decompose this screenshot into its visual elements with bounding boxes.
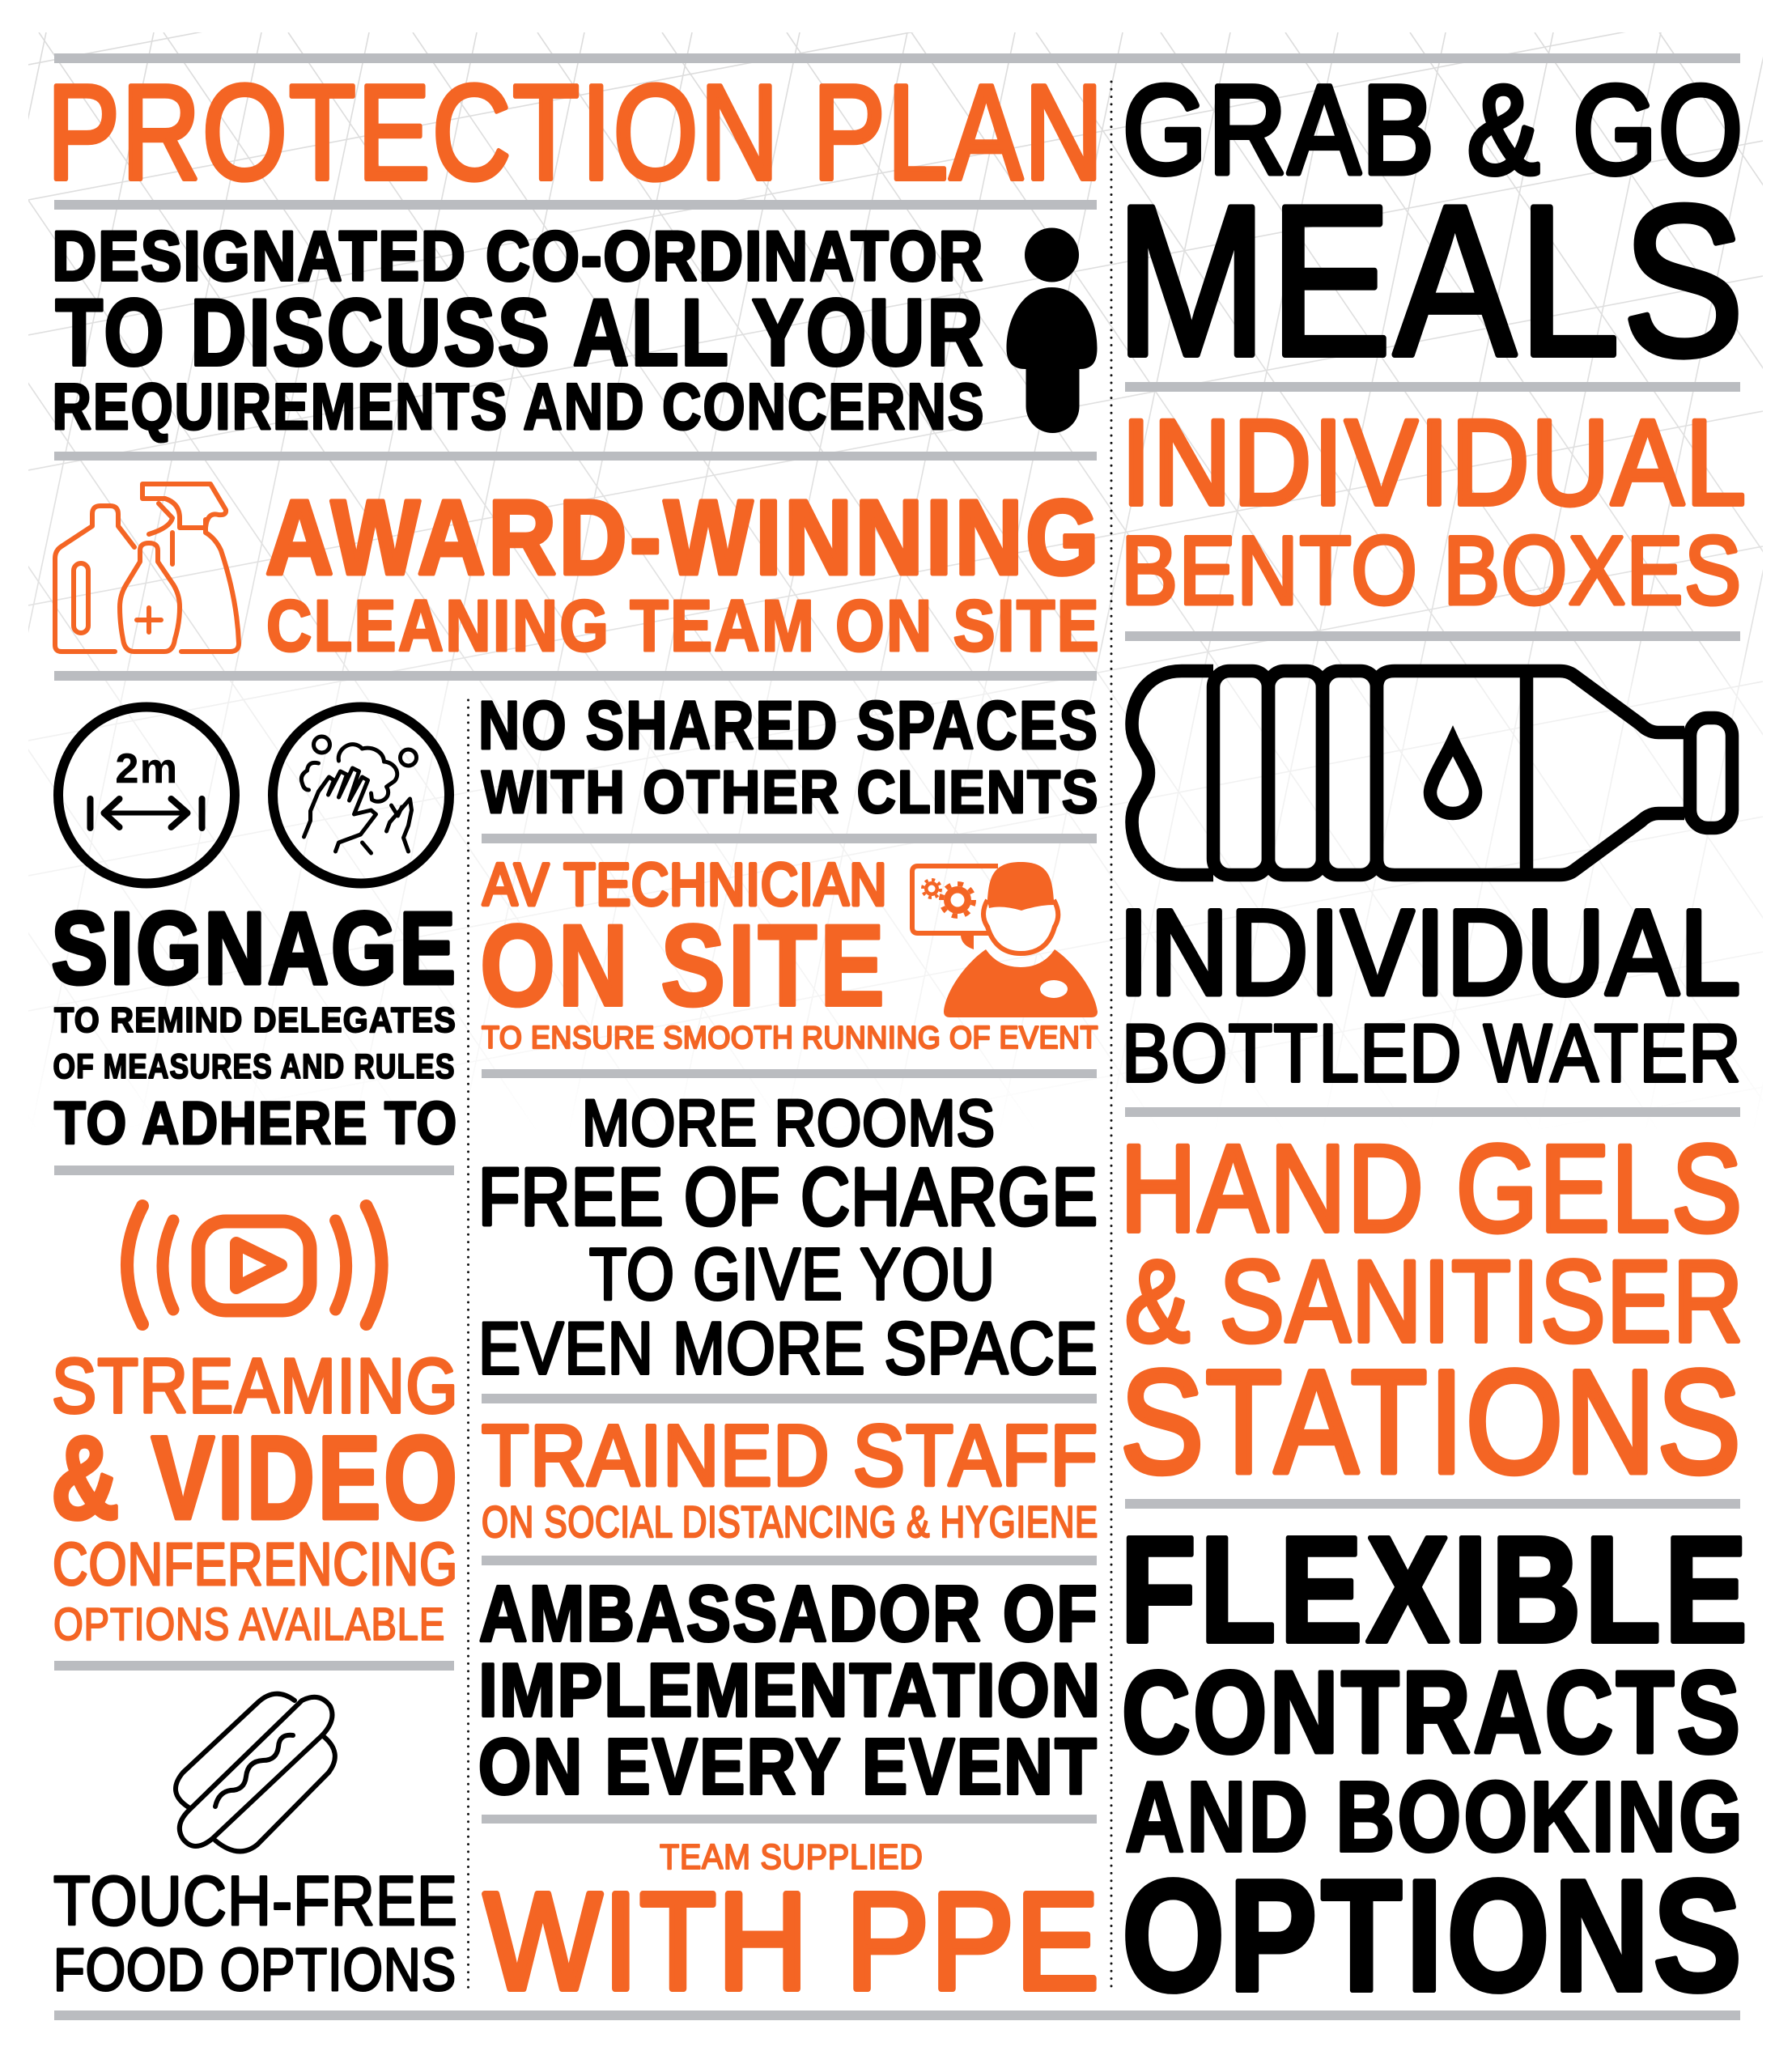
text: to discuss all your: TO DISCUSS ALL YOUR	[55, 279, 986, 385]
text: to give you: TO GIVE YOU	[589, 1234, 996, 1315]
text: touch-free: TOUCH-FREE	[53, 1862, 458, 1940]
panel: ambassador	[478, 1569, 1102, 1811]
text: streaming: STREAMING	[52, 1343, 459, 1429]
text: on social distancing and hygiene: ON SOCIAL DISTANCING & HYGIENE	[482, 1497, 1098, 1547]
text: on every event: ON EVERY EVENT	[478, 1722, 1098, 1811]
text: to adhere to: TO ADHERE TO	[54, 1089, 458, 1157]
panel: signage	[52, 707, 458, 1157]
text: conferencing: CONFERENCING	[53, 1531, 458, 1598]
text: implementation: IMPLEMENTATION	[479, 1648, 1102, 1732]
panel: streaming and video	[51, 1206, 460, 1650]
panel: flexible contracts	[1120, 1506, 1752, 2024]
panel: hand gels and sanitiser	[1120, 1119, 1744, 1504]
panel: trained staff	[482, 1407, 1099, 1547]
icon: 2m distancing	[58, 707, 235, 884]
text: free of charge: FREE OF CHARGE	[478, 1152, 1098, 1242]
text: ambassador of: AMBASSADOR OF	[479, 1569, 1099, 1658]
panel: AV technician	[480, 852, 1098, 1055]
title: Protection Plan: PROTECTION PLAN	[47, 57, 1105, 208]
text: to ensure smooth running of event: TO ENSURE SMOOTH RUNNING OF EVENT	[482, 1021, 1098, 1055]
icon: technician	[912, 862, 1098, 1017]
panel: no shared spaces	[478, 687, 1099, 826]
panel: bento boxes	[1121, 394, 1747, 625]
text: AV technician: AV TECHNICIAN	[482, 852, 887, 918]
text: options available: OPTIONS AVAILABLE	[53, 1599, 445, 1650]
text: trained staff: TRAINED STAFF	[482, 1407, 1099, 1504]
text: on site: ON SITE	[480, 902, 887, 1030]
text: award-winning: AWARD-WINNING	[265, 478, 1102, 597]
text: cleaning team on site: CLEANING TEAM ON SITE	[266, 586, 1101, 667]
panel: grab and go meals	[1115, 60, 1747, 400]
text: team supplied: TEAM SUPPLIED	[660, 1837, 923, 1877]
text: and video: & VIDEO	[51, 1412, 460, 1543]
icon: hand washing	[273, 707, 449, 884]
icon: cleaning bottles	[55, 484, 239, 652]
panel: team supplied with PPE	[484, 1837, 1101, 2019]
icon: person	[1007, 228, 1098, 433]
text: requirements and concerns: REQUIREMENTS AND CONCERNS	[52, 371, 986, 444]
panel: bottled water	[1119, 671, 1742, 1099]
text: food options: FOOD OPTIONS	[53, 1936, 456, 2003]
heading: signage: SIGNAGE	[52, 891, 458, 1005]
icon: water bottle	[1132, 671, 1732, 875]
text: designated co-ordinator: DESIGNATED CO-ORDINATOR	[52, 218, 984, 295]
text: even more space: EVEN MORE SPACE	[478, 1308, 1098, 1390]
text: no shared spaces: NO SHARED SPACES	[478, 687, 1099, 763]
icon: hot dog	[176, 1694, 335, 1851]
text: of measures and rules: OF MEASURES AND RULES	[53, 1047, 455, 1086]
panel: touch-free food	[53, 1694, 458, 2003]
icon: 2m distancing: 2m	[115, 745, 178, 792]
text: with PPE: WITH PPE	[484, 1865, 1101, 2019]
icon: streaming video	[127, 1206, 382, 1324]
text: to remind delegates: TO REMIND DELEGATES	[54, 1000, 456, 1040]
panel: designated co-ordinator	[52, 218, 1098, 444]
panel: more rooms	[478, 1087, 1098, 1390]
panel: cleaning team	[55, 478, 1102, 667]
text: with other clients: WITH OTHER CLIENTS	[482, 758, 1099, 826]
text: more rooms: MORE ROOMS	[582, 1087, 996, 1160]
